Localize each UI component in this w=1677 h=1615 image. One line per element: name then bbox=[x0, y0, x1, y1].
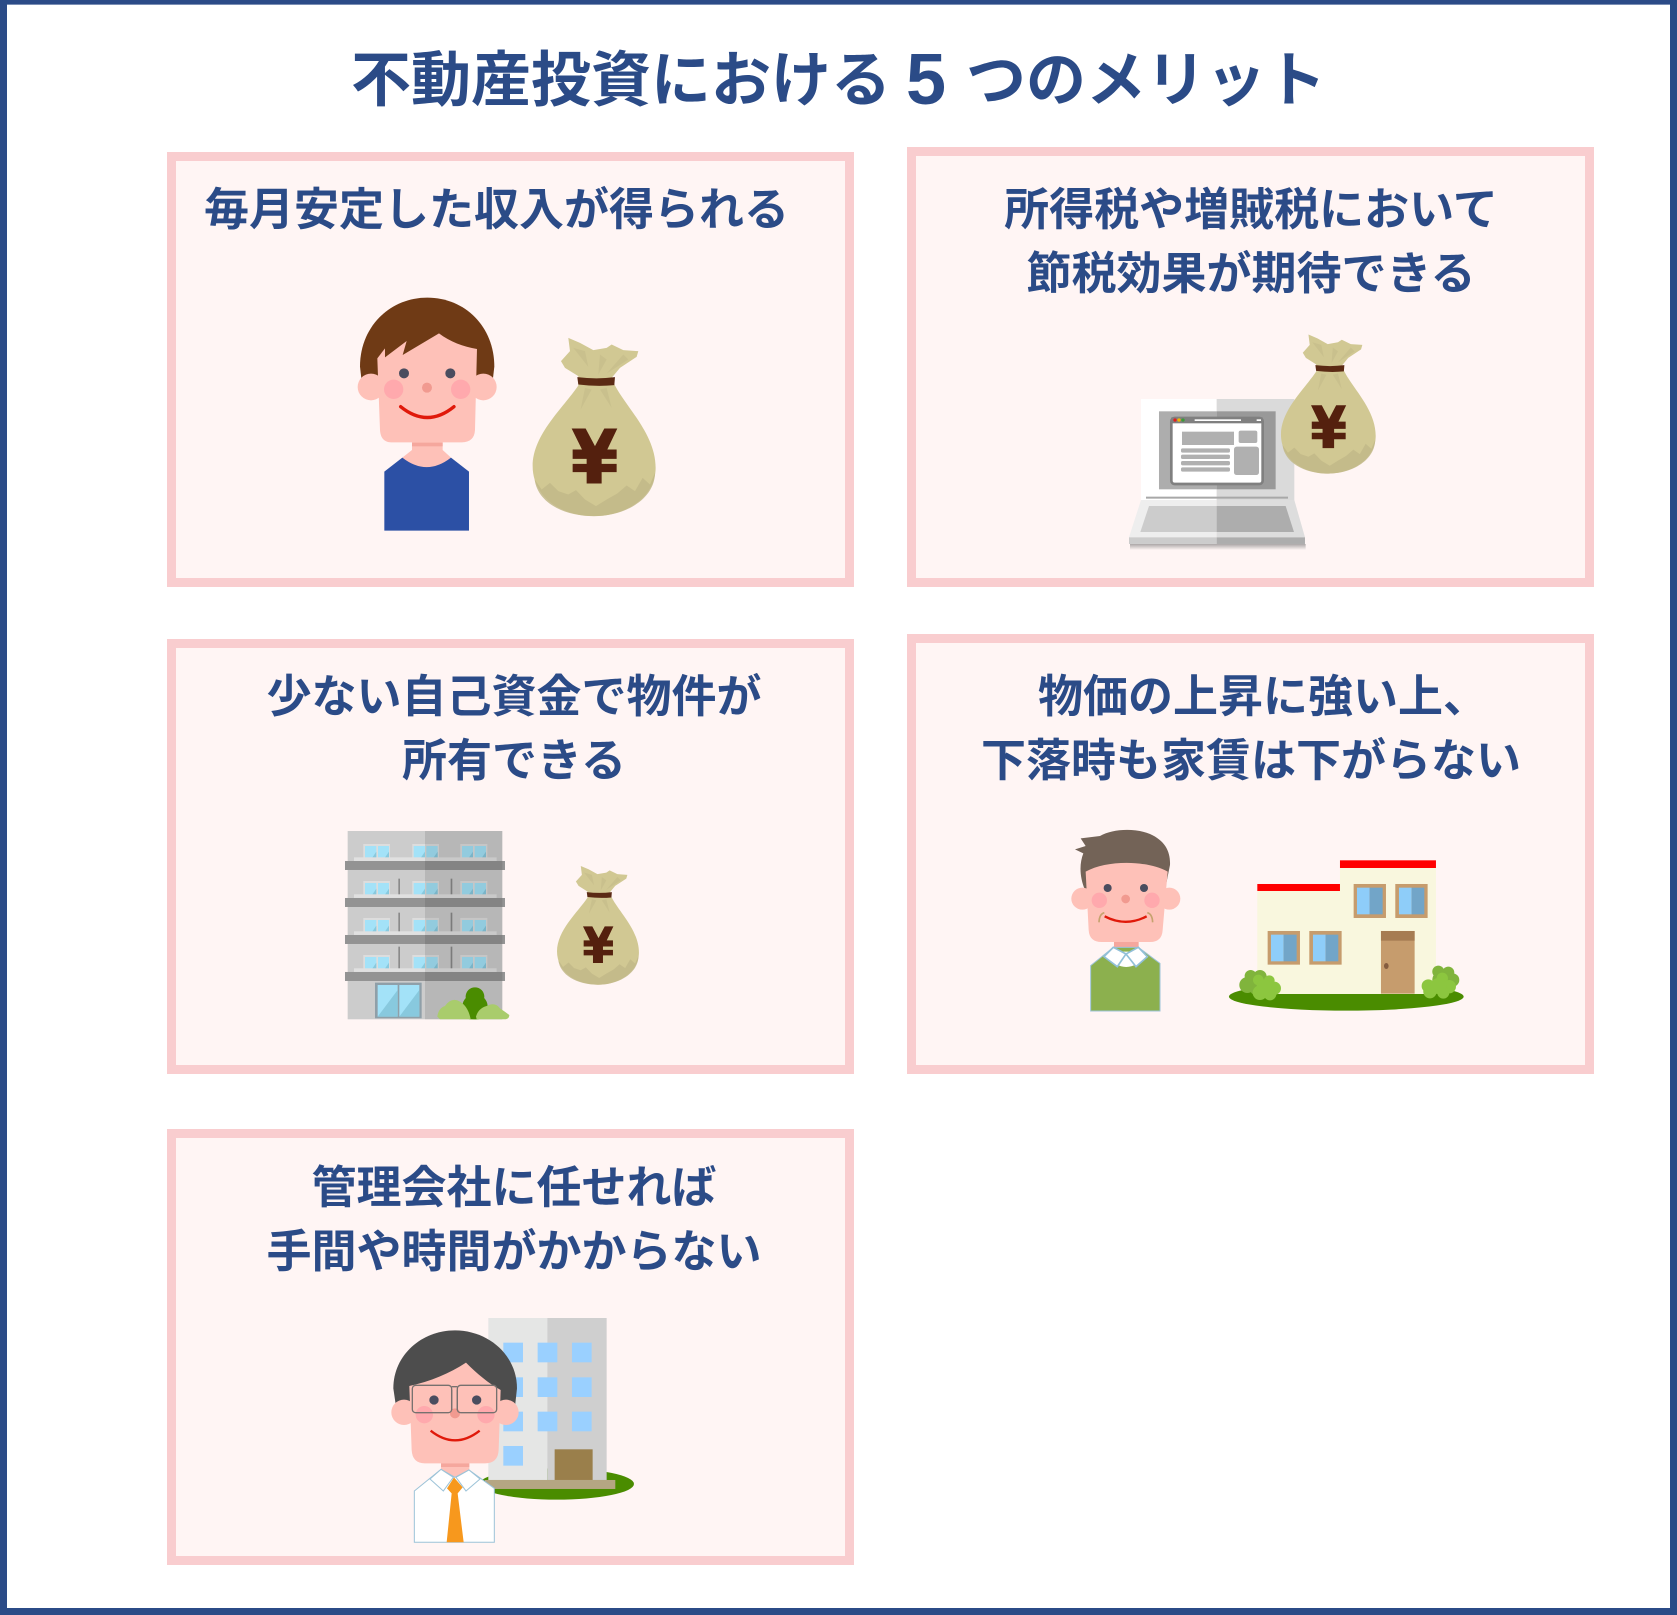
heading: low capital: 少ない自己資金で物件が bbox=[266, 671, 762, 722]
icon: laptop bbox=[1129, 399, 1306, 550]
heading: management company bbox=[266, 1162, 762, 1277]
heading: management company: 手間や時間がかからない bbox=[266, 1226, 762, 1277]
title: 5 bbox=[906, 40, 946, 120]
icon: money bag bbox=[533, 338, 656, 516]
title: つのメリット bbox=[966, 47, 1326, 114]
panel: low capital bbox=[172, 644, 850, 1070]
heading: tax saving: 所得税や増賊税において bbox=[1004, 184, 1498, 235]
icon: money bag bbox=[1281, 334, 1376, 474]
title: 不動産投資における bbox=[351, 47, 891, 114]
heading: inflation resistance: 下落時も家賃は下がらない bbox=[981, 735, 1521, 786]
icon: apartment building bbox=[345, 831, 509, 1019]
heading: inflation resistance: 物価の上昇に強い上、 bbox=[1038, 671, 1488, 722]
heading: management company: 管理会社に任せれば bbox=[311, 1162, 717, 1213]
panel: stable monthly income bbox=[172, 156, 850, 582]
icon: office building bbox=[479, 1318, 634, 1500]
heading: tax saving bbox=[1004, 184, 1498, 299]
heading: stable monthly income: 毎月安定した収入が得られる bbox=[204, 184, 789, 235]
panel: tax saving bbox=[912, 152, 1590, 582]
icon: older man in green sweater bbox=[1071, 830, 1180, 1011]
icon: man with glasses and tie bbox=[391, 1330, 519, 1542]
panel: management company bbox=[172, 1134, 850, 1560]
icon: money bag bbox=[557, 866, 639, 985]
heading: low capital: 所有できる bbox=[402, 735, 626, 786]
title bbox=[351, 40, 1326, 120]
heading: low capital bbox=[266, 671, 762, 786]
icon: smiling man in blue shirt bbox=[358, 298, 497, 531]
heading: inflation resistance bbox=[981, 671, 1521, 786]
icon: house bbox=[1229, 860, 1464, 1011]
panel: inflation resistance bbox=[912, 638, 1590, 1070]
heading: tax saving: 節税効果が期待できる bbox=[1026, 248, 1476, 299]
